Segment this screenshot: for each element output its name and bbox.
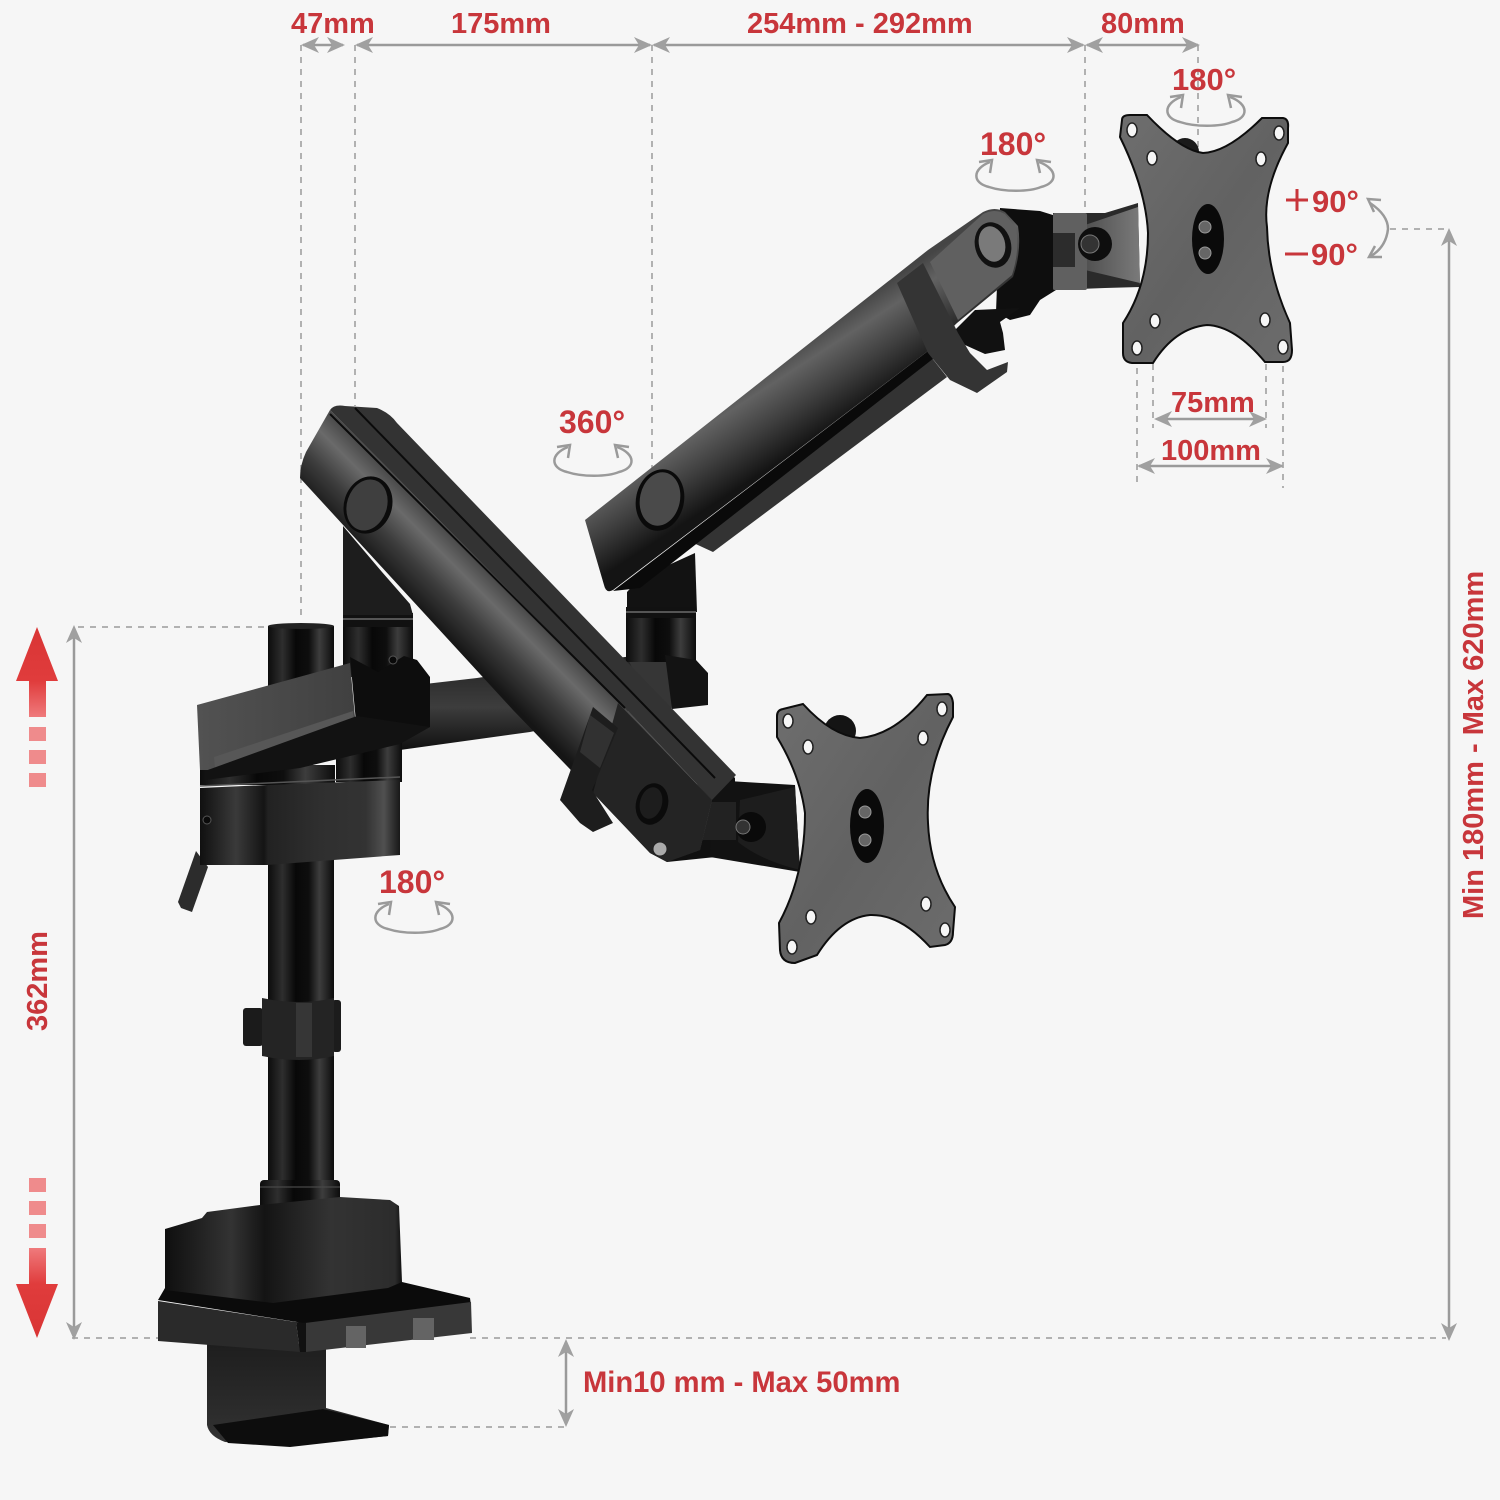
lever handle [178,851,208,912]
second joint cylinder [343,613,413,677]
red up arrow [16,627,58,787]
label: 362mm: 362mm [22,931,54,1031]
label: plus 90: 90° [1312,184,1359,219]
label: overall height: Min 180mm - Max 620mm [1458,571,1490,919]
big arm joint to left bracket [640,773,735,862]
cover ring [897,263,1008,393]
right bracket [1053,203,1140,290]
label: minus 90: 90° [1311,237,1358,272]
left knob behind plate [824,715,856,747]
elbow tube [627,655,672,708]
top button [970,218,1016,272]
arrow: 75mm [1154,411,1267,427]
label: 47mm: 47mm [291,8,375,40]
label: 80mm: 80mm [1101,8,1185,40]
bolt [653,842,667,856]
label: wrist 180: 180° [980,126,1046,162]
arrow: 80mm dimension [1085,37,1200,53]
big arm [300,406,736,862]
label: 75mm: 75mm [1171,387,1255,419]
clamp lower lip [213,1409,389,1447]
rear arm upright [343,526,413,615]
height collar on pole [243,998,341,1060]
clamp base tray [158,1282,472,1352]
rotation icon: wrist [976,160,1054,191]
arrow: 362mm height [66,625,82,1340]
label: minus 90 [1285,237,1358,272]
mounting holes [783,702,950,954]
label: clamp thickness: Min10 mm - Max 50mm [583,1367,900,1399]
horizontal base arm behind [380,655,680,750]
clamp top box [165,1197,402,1303]
mounting holes [1127,123,1288,355]
lower end face [593,703,712,862]
lower pole [268,850,334,1195]
centre slot [1192,204,1224,274]
swing arm bracket [197,656,430,780]
rotation icon: tilt [1368,199,1388,257]
right VESA plate [1120,115,1292,363]
label: base 180: 180° [379,864,445,900]
arrow: 47mm dimension [301,37,345,53]
label: 100mm: 100mm [1161,435,1261,467]
label: 360: 360° [559,404,625,440]
end button [631,780,673,828]
upper arm cable clip [955,308,1020,354]
label: 254mm - 292mm: 254mm - 292mm [747,8,973,40]
end face highlight [930,211,1017,320]
rotation icon: base [375,902,453,933]
arrow: 254-292mm dimension [652,37,1085,53]
pole base ring [260,1180,340,1210]
left VESA plate [777,694,955,963]
label: plus 90 [1286,184,1359,219]
upper pole stub [268,623,334,701]
arrow: overall height [1441,228,1457,1341]
left bracket [698,780,800,872]
arrow: 100mm [1137,458,1284,474]
centre slot [850,789,884,863]
right knob behind plate [1171,138,1199,166]
button [336,470,400,540]
rear cylinder below bracket [336,740,402,782]
rotation icon: 360 [554,445,632,476]
rotation icon: top plate [1167,95,1245,126]
arrow: 175mm dimension [355,37,652,53]
upper arm [585,209,1019,591]
button [630,465,690,535]
label: 175mm: 175mm [451,8,551,40]
arrow: clamp thickness [558,1339,574,1427]
tray buttons [346,1318,434,1348]
upper joint cylinder [626,553,697,662]
big arm cover ring [560,707,618,832]
elbow joint [665,655,708,709]
red down arrow [16,1178,58,1338]
collar stack [200,765,400,865]
label: top plate 180: 180° [1172,62,1236,97]
upper arm end joint [996,208,1056,320]
clamp lower bracket [207,1340,389,1446]
